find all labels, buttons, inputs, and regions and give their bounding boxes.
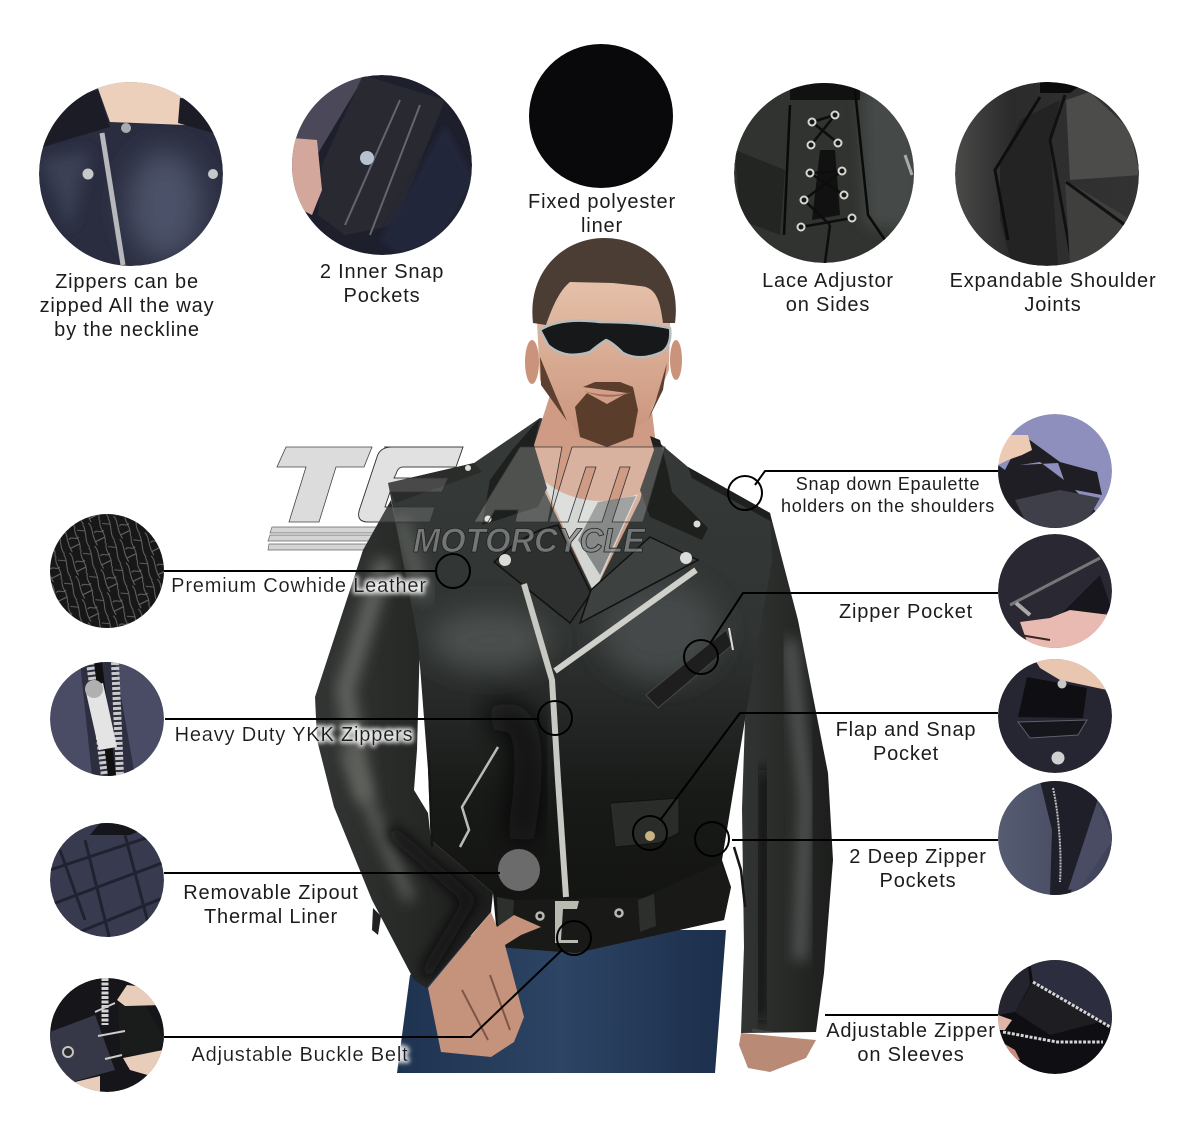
collar right (640, 436, 708, 540)
sideburn left (540, 357, 567, 421)
callout lines and rings (164, 471, 998, 1037)
cuff snap (372, 908, 381, 935)
side lace (429, 760, 745, 907)
right arm (741, 513, 833, 1033)
label: neckline zippers: by the neckline (54, 319, 200, 341)
pocket snap (645, 831, 655, 841)
label: sleeve zipper: on Sleeves (857, 1044, 965, 1066)
label: zipper pocket: Zipper Pocket (839, 601, 973, 623)
label: polyester liner: Fixed polyester (528, 191, 676, 213)
right detail 5: sleeve zipper (998, 960, 1112, 1074)
top detail 4: lace adjustor (734, 83, 920, 263)
watermark: team logo background (268, 447, 463, 550)
label: buckle belt: Adjustable Buckle Belt (191, 1044, 409, 1066)
watermark: team logo overlay: MOTORCYCLE (413, 522, 646, 560)
right hand (739, 1033, 816, 1072)
face (537, 275, 670, 447)
left lapel (494, 525, 591, 623)
label: thermal liner: Removable Zipout (183, 882, 359, 904)
neck opening collar left (482, 418, 547, 525)
label: shoulder joints: Joints (1024, 294, 1082, 316)
label: shoulder joints: Expandable Shoulder (950, 270, 1156, 292)
label: neckline zippers: zipped All the way (40, 295, 214, 317)
label: polyester liner: liner (581, 215, 623, 237)
label: deep zipper pockets: 2 Deep Zipper (849, 846, 987, 868)
belt (497, 863, 731, 953)
label: inner snap pockets: 2 Inner Snap (320, 261, 444, 283)
t-shirt (541, 478, 638, 593)
head (525, 238, 682, 447)
jacket torso (380, 410, 780, 960)
right detail 2: zipper pocket (998, 534, 1112, 650)
zip pocket (646, 630, 732, 708)
right epaulette (688, 467, 772, 522)
left arm (310, 495, 500, 995)
lips (584, 391, 632, 397)
left detail 2: YKK zipper (50, 662, 164, 776)
lapel and collar snaps (465, 465, 700, 566)
left epaulette (388, 463, 482, 503)
label: sleeve zipper: Adjustable Zipper (826, 1020, 996, 1042)
left hand (428, 912, 541, 1057)
lower left pocket (460, 747, 498, 847)
thermal liner patch (498, 849, 540, 891)
flap pocket (610, 798, 679, 847)
left detail 4: buckle belt (50, 978, 165, 1092)
label: epaulette holders: Snap down Epaulette (796, 474, 980, 494)
sunglasses (540, 321, 670, 357)
left detail 1: cowhide leather (50, 514, 164, 628)
buckle (555, 901, 579, 943)
finger gaps (462, 975, 510, 1040)
label: flap and snap pocket: Flap and Snap (836, 719, 976, 741)
top detail 3: polyester liner (529, 44, 673, 188)
label: neckline zippers: Zippers can be (55, 271, 199, 293)
zip pocket pull (729, 628, 733, 650)
label: lace adjustor: Lace Adjustor (762, 270, 894, 292)
top detail 2: inner snap pocket (292, 75, 475, 255)
top detail 5: shoulder joints (955, 80, 1140, 266)
main zipper (524, 584, 566, 897)
right detail 4: deep zipper pockets (998, 781, 1114, 895)
neck (534, 395, 656, 593)
ears (525, 340, 539, 384)
label: thermal liner: Thermal Liner (204, 906, 338, 928)
goatee (575, 382, 638, 447)
top detail 1: neckline zipper (39, 80, 225, 266)
label: YKK zippers: Heavy Duty YKK Zippers (175, 724, 413, 746)
label: lace adjustor: on Sides (786, 294, 870, 316)
belt grommets (536, 910, 622, 920)
shirt print (578, 496, 636, 575)
upper zipper (555, 570, 696, 671)
label: epaulette holders: holders on the shoulders (781, 496, 995, 516)
label: cowhide leather: Premium Cowhide Leather (171, 575, 427, 597)
man wearing leather jacket (310, 238, 840, 1073)
right lapel (580, 537, 698, 623)
label: inner snap pockets: Pockets (344, 285, 420, 307)
watermark: team logo overlay (359, 447, 665, 560)
left detail 3: thermal liner (50, 823, 170, 940)
label: deep zipper pockets: Pockets (880, 870, 956, 892)
right detail 3: flap and snap pocket (998, 655, 1112, 773)
sideburn right (648, 363, 667, 420)
hair (532, 238, 676, 325)
right detail 1: epaulette holders (998, 414, 1112, 530)
belt keepers (497, 894, 656, 932)
jeans (397, 930, 726, 1073)
label: flap and snap pocket: Pocket (873, 743, 939, 765)
